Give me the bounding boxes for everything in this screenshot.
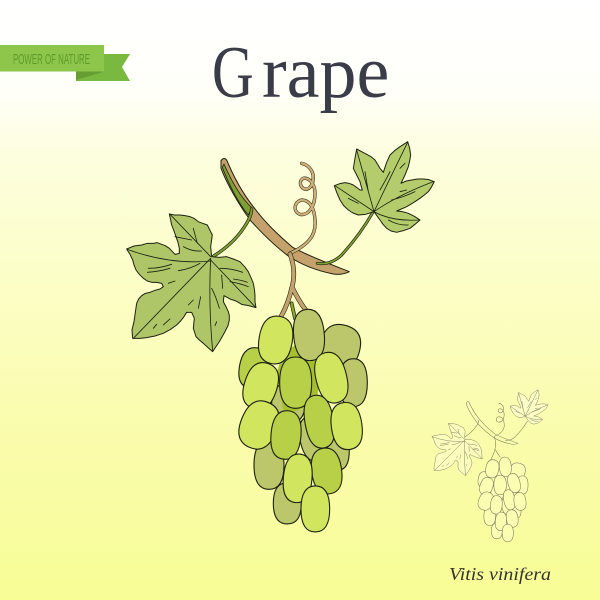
ribbon body [0, 45, 104, 72]
tendril [290, 163, 315, 253]
left leaf stalk [212, 209, 252, 257]
ribbon fold [76, 71, 103, 80]
sketch: left leaf [432, 423, 482, 476]
grape bunch [233, 308, 367, 532]
branch green section [222, 164, 252, 215]
illustration: grape branch [127, 142, 434, 352]
branch [221, 158, 349, 274]
ribbon tail [76, 54, 130, 81]
sketch: branch [463, 401, 528, 460]
latin name: Vitis vinifera [449, 564, 551, 584]
fruit stalk [281, 254, 306, 318]
right leaf [334, 142, 434, 232]
small outline sketch [432, 390, 548, 542]
sketch: right leaf [510, 390, 548, 424]
sketch: grapes [476, 457, 528, 542]
title: G [212, 32, 254, 114]
title: rape [262, 32, 389, 114]
left leaf [127, 214, 256, 352]
ribbon banner [0, 45, 130, 81]
stems [212, 158, 373, 318]
ribbon label: POWER OF NATURE [13, 51, 90, 68]
right leaf stalk [317, 212, 373, 264]
